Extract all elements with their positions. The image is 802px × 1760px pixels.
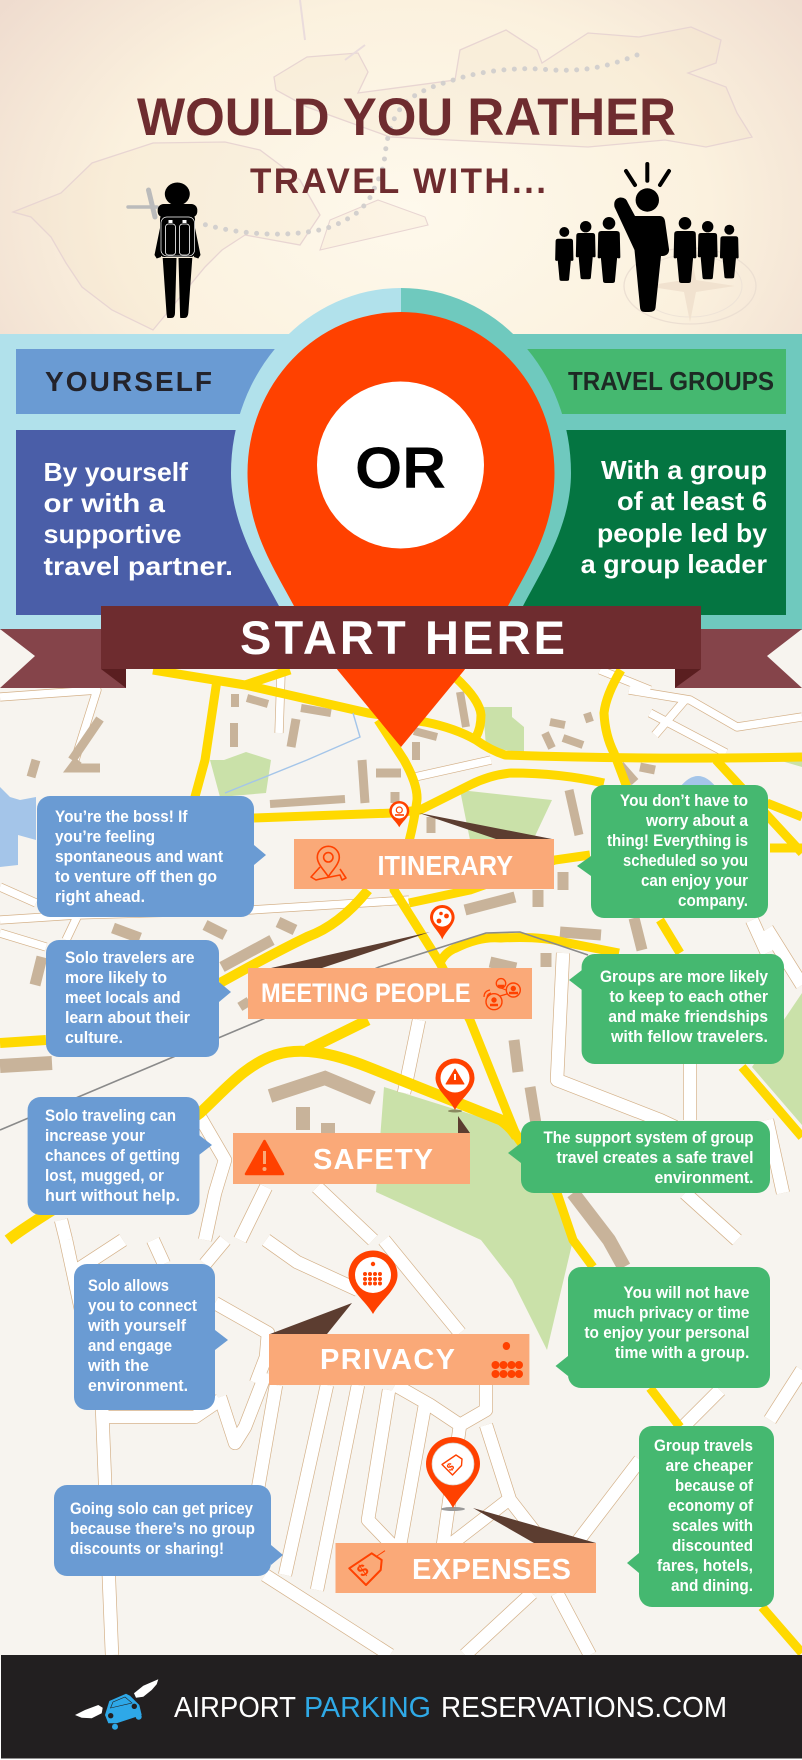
dotted travel route	[199, 55, 637, 234]
callout: solo itinerary: spontaneous and want	[55, 847, 223, 866]
location pin halo	[231, 288, 571, 632]
icon: price tag: $	[354, 1560, 373, 1581]
callout: group expenses	[627, 1426, 774, 1607]
callout: group privacy: time with a group.	[615, 1343, 749, 1362]
icon: winged car logo	[75, 1679, 158, 1730]
callout: solo itinerary: you’re feeling	[55, 827, 155, 846]
label: safety: SAFETY	[313, 1144, 433, 1176]
callout: solo meeting people	[46, 940, 231, 1057]
icon: warning triangle	[246, 1141, 283, 1174]
callout: group itinerary: thing! Everything is	[607, 831, 748, 850]
ribbon: start here: START HERE	[240, 611, 565, 664]
callout: group itinerary: scheduled so you	[623, 851, 748, 870]
map background: header parchment	[0, 0, 802, 340]
panel: travel groups description	[401, 430, 786, 615]
callout: solo itinerary	[37, 796, 266, 917]
callout: group meeting people: and make friendships	[608, 1007, 768, 1026]
comparison band	[0, 334, 802, 630]
heading: travel groups: TRAVEL GROUPS	[568, 366, 774, 396]
callout: solo safety: Solo traveling can	[45, 1106, 176, 1125]
callout: solo meeting people: culture.	[65, 1028, 123, 1047]
callout: solo privacy: Solo allows	[88, 1276, 169, 1295]
callout: solo safety	[28, 1097, 212, 1215]
callout: solo expenses: because there’s no group	[70, 1519, 255, 1538]
callout: solo safety: lost, mugged, or	[45, 1166, 164, 1185]
callout: group safety: environment.	[654, 1168, 754, 1187]
callout: solo meeting people: meet locals and	[65, 988, 181, 1007]
callout: solo privacy: with yourself	[87, 1316, 186, 1335]
callout: solo privacy: with the	[87, 1356, 149, 1375]
callout: group safety: travel creates a safe travel	[556, 1148, 754, 1167]
callout: solo itinerary: right ahead.	[55, 887, 145, 906]
callout: group meeting people: with fellow travelers.	[610, 1027, 768, 1046]
text: travel groups description: people led by	[597, 518, 768, 548]
callout: group itinerary: You don’t have to	[620, 791, 748, 810]
callout: solo safety: chances of getting	[45, 1146, 180, 1165]
callout: group privacy: much privacy or time	[593, 1303, 749, 1322]
callout: solo meeting people: more likely to	[65, 968, 167, 987]
footer bar	[1, 1655, 802, 1758]
icon: network of people	[484, 979, 520, 1010]
large location pin with OR: OR	[355, 436, 446, 501]
text: yourself description: or with a	[44, 488, 166, 518]
callout: group privacy: to enjoy your personal	[584, 1323, 749, 1342]
callout: group safety	[508, 1121, 770, 1193]
railway and stream	[0, 713, 588, 1130]
callout: solo safety: hurt without help.	[45, 1186, 180, 1205]
text: yourself description	[44, 457, 233, 581]
text: travel groups description	[581, 455, 768, 579]
minor roads	[0, 670, 802, 1655]
callout: group itinerary: worry about a	[645, 811, 748, 830]
parks and water	[0, 707, 802, 1350]
callout: solo expenses: discounts or sharing!	[70, 1539, 224, 1558]
text: travel groups description: With a group	[601, 455, 767, 485]
brand name	[174, 1692, 727, 1724]
callout: solo safety: increase your	[45, 1126, 145, 1145]
panel: travel groups heading	[401, 349, 786, 414]
callout: solo privacy: you to connect	[88, 1296, 197, 1315]
panel: yourself description	[16, 430, 401, 615]
text: yourself description: travel partner.	[44, 551, 233, 581]
street map	[0, 600, 802, 1660]
callout: group expenses: and dining.	[671, 1576, 753, 1595]
pin: meeting people	[430, 905, 455, 939]
label: privacy: PRIVACY	[320, 1344, 455, 1376]
pin: expenses	[426, 1437, 480, 1511]
large location pin with OR	[248, 312, 554, 747]
pin: itinerary	[389, 801, 409, 827]
icon: price tag	[349, 1551, 385, 1585]
label: expenses	[336, 1543, 596, 1593]
callout: group itinerary: company.	[678, 891, 748, 910]
callout: group safety: The support system of group	[544, 1128, 754, 1147]
pin: expenses: $	[445, 1461, 457, 1474]
callout: group expenses: scales with	[672, 1516, 753, 1535]
connector shadows from pins to labels	[270, 813, 596, 1543]
panel: yourself heading	[16, 349, 401, 414]
title: WOULD YOU RATHER	[137, 88, 676, 147]
callout: solo itinerary: to venture off then go	[55, 867, 217, 886]
callout: solo expenses	[54, 1485, 283, 1576]
icon: group with leader	[555, 164, 739, 312]
label: meeting people: MEETING PEOPLE	[261, 978, 471, 1008]
brand name: PARKING	[304, 1692, 431, 1724]
callout: group expenses: Group travels	[654, 1436, 753, 1455]
pin: safety	[436, 1058, 474, 1112]
buildings	[0, 692, 655, 1267]
subtitle: TRAVEL WITH...	[250, 162, 546, 201]
text: yourself description: supportive	[44, 519, 182, 549]
text: travel groups description: a group leader	[581, 549, 767, 579]
callout: group meeting people: Groups are more likely	[600, 967, 768, 986]
callout: solo privacy	[74, 1264, 228, 1410]
text: travel groups description: of at least 6	[617, 486, 767, 516]
callout: solo meeting people: Solo travelers are	[65, 948, 194, 967]
brand name: AIRPORT	[174, 1692, 296, 1724]
label: expenses: EXPENSES	[412, 1554, 571, 1586]
callout: group privacy: You will not have	[623, 1283, 749, 1302]
callout: solo meeting people: learn about their	[65, 1008, 190, 1027]
callout: solo expenses: Going solo can get pricey	[70, 1499, 253, 1518]
label: safety	[233, 1133, 470, 1184]
callout: group meeting people: to keep to each other	[609, 987, 768, 1006]
callout: group expenses: because of	[675, 1476, 753, 1495]
ribbon: start here	[0, 606, 802, 688]
label: privacy	[269, 1334, 529, 1385]
callout: group itinerary	[577, 785, 768, 918]
icon: solo backpacker with plane	[128, 182, 200, 318]
callout: solo privacy: and engage	[88, 1336, 172, 1355]
callout: group meeting people	[569, 954, 784, 1064]
callout: group privacy	[556, 1267, 770, 1388]
brand name: RESERVATIONS.COM	[441, 1692, 727, 1724]
callout: group itinerary: can enjoy your	[641, 871, 748, 890]
label: itinerary	[294, 839, 554, 889]
icon: map pin	[311, 846, 346, 880]
callout: group expenses: discounted	[672, 1536, 753, 1555]
heading: yourself: YOURSELF	[45, 366, 212, 397]
callout: group expenses: are cheaper	[666, 1456, 753, 1475]
callout: solo privacy: environment.	[88, 1376, 188, 1395]
text: yourself description: By yourself	[44, 457, 188, 487]
callout: solo itinerary: You’re the boss! If	[55, 807, 188, 826]
callout: group expenses: economy of	[668, 1496, 753, 1515]
major roads	[0, 670, 802, 1653]
callout: group expenses: fares, hotels,	[657, 1556, 753, 1575]
label: itinerary: ITINERARY	[378, 850, 513, 881]
pin: privacy	[348, 1250, 398, 1314]
label: meeting people	[248, 968, 532, 1019]
icon: privacy dots	[492, 1342, 523, 1378]
